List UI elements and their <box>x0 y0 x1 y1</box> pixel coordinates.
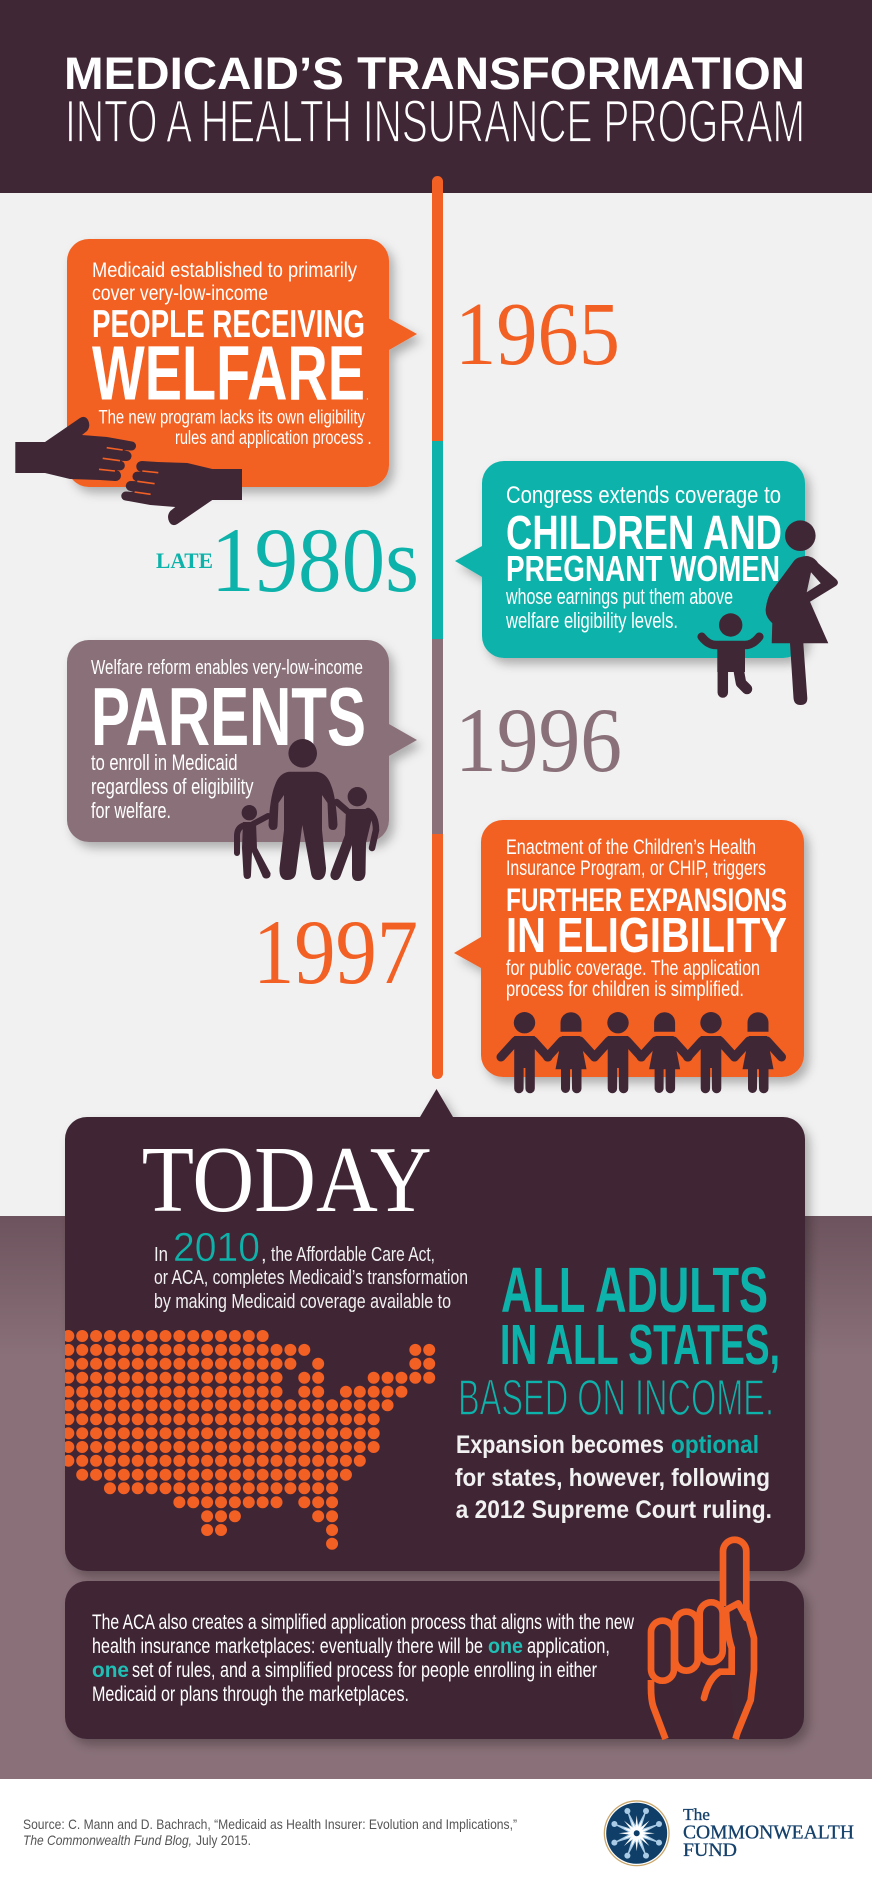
intro text: Congress extends coverage to <box>506 482 781 509</box>
heading: PARENTS <box>91 670 366 763</box>
panel: late 1980s children and pregnant women <box>455 461 805 658</box>
year 1996: 1996 <box>455 689 622 791</box>
timeline bar <box>432 176 443 1079</box>
intro text: Insurance Program, or CHIP, triggers <box>506 857 766 880</box>
intro text: Medicaid established to primarily <box>92 259 357 282</box>
speech bubble <box>454 820 804 1077</box>
speech bubble <box>67 640 417 842</box>
body text <box>92 1611 635 1706</box>
logo wordmark: COMMONWEALTH <box>683 1821 854 1843</box>
heading: today: TODAY <box>142 1128 432 1232</box>
detail text: to enroll in Medicaid <box>91 750 238 775</box>
intro text: 2010 <box>173 1224 260 1270</box>
body text: set of rules, and a simplified process for people enrolling in either <box>132 1659 597 1682</box>
heading: CHILDREN AND <box>506 507 782 560</box>
year late 1980s: 1980s <box>211 509 419 611</box>
box with pointer <box>65 1089 805 1571</box>
optional expansion note: for states, however, following <box>455 1464 770 1492</box>
icon: family of three <box>237 739 376 881</box>
intro text: Welfare reform enables very-low-income <box>91 657 363 679</box>
heading: WELFARE <box>92 330 365 416</box>
heading <box>506 882 787 963</box>
heading: . <box>366 392 369 402</box>
panel: simplified application process <box>65 1581 804 1739</box>
detail text <box>505 584 733 633</box>
optional expansion note: optional <box>671 1431 759 1459</box>
logo emblem <box>600 1797 673 1870</box>
detail text: welfare eligibility levels. <box>505 608 678 633</box>
source note: The Commonwealth Fund Blog, <box>23 1832 192 1848</box>
detail text: rules and application process . <box>175 428 372 449</box>
year 1965: 1965 <box>455 285 620 384</box>
intro text <box>506 836 766 880</box>
heading: PEOPLE RECEIVING <box>92 303 365 346</box>
heading: IN ELIGIBILITY <box>506 909 787 963</box>
body text: one <box>92 1659 129 1682</box>
body text: application, <box>527 1635 610 1658</box>
intro text: or ACA, completes Medicaid’s transformation <box>154 1267 468 1289</box>
detail text: regardless of eligibility <box>91 774 254 799</box>
detail text: The new program lacks its own eligibility <box>98 408 365 428</box>
title line one: MEDICAID’S TRANSFORMATION <box>64 48 805 99</box>
intro text: the Affordable Care Act, <box>271 1244 435 1266</box>
logo: The Commonwealth Fund <box>600 1797 854 1870</box>
source note: July 2015. <box>196 1832 251 1848</box>
panel: 1996 parents <box>67 640 417 842</box>
detail text: for welfare. <box>91 798 171 823</box>
logo wordmark <box>683 1805 854 1861</box>
heading <box>506 507 782 589</box>
body text: The ACA also creates a simplified application process that aligns with the new <box>92 1611 635 1634</box>
year 1997: 1997 <box>253 901 418 1003</box>
body text: Medicaid or plans through the marketplaces. <box>92 1683 409 1706</box>
intro text <box>154 1224 468 1313</box>
intro text: by making Medicaid coverage available to <box>154 1291 451 1313</box>
year late 1980s: LATE <box>156 548 213 573</box>
panel: today <box>65 1089 805 1571</box>
intro text <box>92 259 357 305</box>
logo wordmark: The <box>683 1805 710 1824</box>
dot map of the United States <box>68 1336 430 1544</box>
body text: health insurance marketplaces: eventually there will be <box>92 1635 483 1658</box>
icon: child with raised arms <box>702 613 759 692</box>
optional expansion note: a 2012 Supreme Court ruling. <box>456 1496 772 1524</box>
optional expansion note: Expansion becomes <box>456 1431 664 1459</box>
heading: FURTHER EXPANSIONS <box>506 882 787 918</box>
panel: 1965 welfare <box>67 239 417 487</box>
heading <box>92 303 369 416</box>
heading: all adults in all states <box>458 1254 780 1426</box>
detail text <box>91 750 254 823</box>
body text: one <box>488 1635 523 1658</box>
icon: row of six children holding hands <box>501 1012 782 1093</box>
intro text: Enactment of the Children’s Health <box>506 836 756 859</box>
optional expansion note <box>455 1431 772 1524</box>
source note: Source: C. Mann and D. Bachrach, “Medicaid as Health Insurer: Evolution and Implications,” <box>23 1816 517 1832</box>
intro text: cover very-low-income <box>92 282 268 305</box>
title banner <box>0 0 872 193</box>
detail text: process for children is simplified. <box>506 978 744 1001</box>
intro text: , <box>261 1244 267 1266</box>
detail text <box>506 957 760 1001</box>
detail text <box>98 408 372 449</box>
icon: hand pointing up <box>651 1540 754 1739</box>
speech bubble <box>67 239 417 487</box>
intro text: In <box>154 1244 168 1266</box>
heading: PREGNANT WOMEN <box>506 548 780 589</box>
icon: pregnant woman <box>766 520 838 705</box>
source note <box>23 1816 517 1848</box>
speech bubble <box>455 461 805 658</box>
logo wordmark: FUND <box>683 1840 737 1861</box>
icon: two hands <box>15 417 242 525</box>
detail text: whose earnings put them above <box>505 584 733 609</box>
detail text: for public coverage. The application <box>506 957 760 980</box>
panel: 1997 CHIP <box>454 820 804 1077</box>
